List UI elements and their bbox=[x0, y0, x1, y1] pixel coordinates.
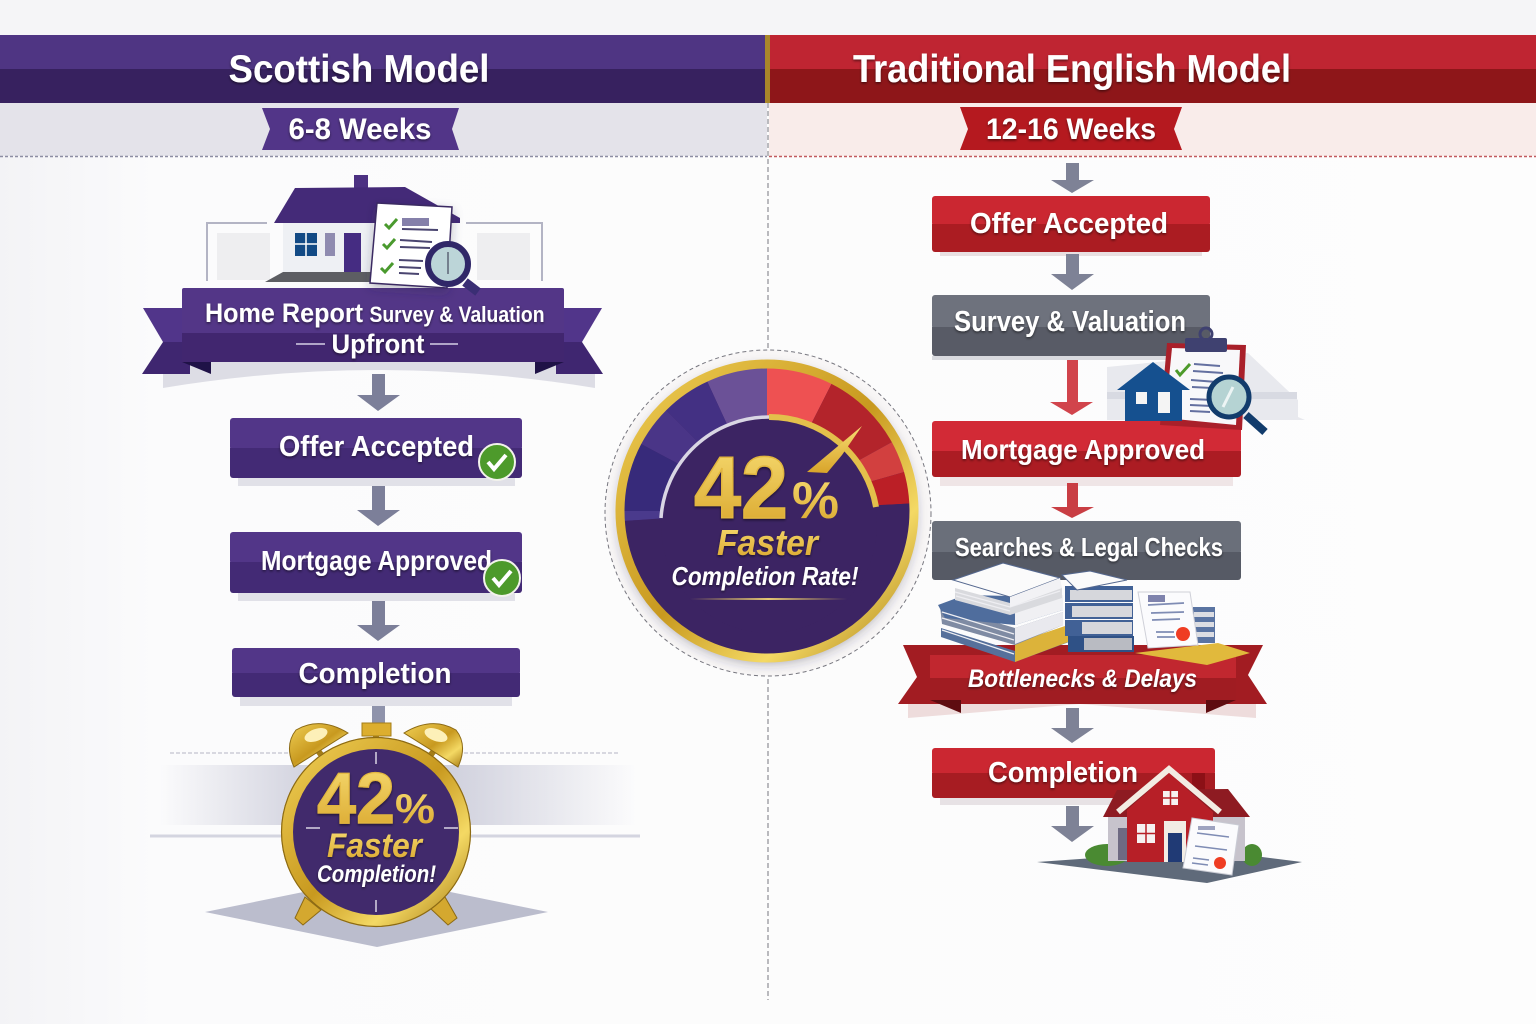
arrow: Mortgage to Searches (red) bbox=[1051, 483, 1094, 518]
arrow: Offer Accepted to Survey bbox=[1051, 254, 1094, 290]
step: Offer Accepted (Scottish) bbox=[230, 418, 522, 486]
icon: alarm clock 42% Faster Completion bbox=[282, 706, 470, 926]
arrow: Offer Accepted to Mortgage Approved bbox=[357, 486, 400, 526]
step: Offer Accepted (Scottish): Offer Accepted bbox=[279, 431, 474, 463]
step: Mortgage Approved (Scottish): Mortgage Approved bbox=[261, 545, 492, 576]
ribbon: Home Report Survey & Valuation Upfront: Upfront bbox=[332, 329, 425, 359]
arrow: Bottlenecks to Completion bbox=[1051, 708, 1094, 743]
backdrop band behind alarm clock bbox=[150, 753, 640, 947]
step: Searches & Legal Checks bbox=[932, 521, 1241, 580]
step: Mortgage Approved (English): Mortgage Approved bbox=[961, 434, 1205, 465]
duration band: 12-16 Weeks: 12-16 Weeks bbox=[986, 113, 1156, 146]
arrow: Completion onward bbox=[1051, 806, 1094, 842]
step: Completion (English): Completion bbox=[988, 757, 1138, 789]
ribbon: Home Report Survey & Valuation Upfront bbox=[142, 288, 603, 388]
icon: stacks of books and legal documents bbox=[938, 563, 1250, 665]
step: Completion (English) bbox=[932, 748, 1215, 805]
icon: alarm clock 42% Faster Completion: % bbox=[395, 785, 435, 832]
step: Mortgage Approved (Scottish) bbox=[230, 532, 522, 601]
ribbon: Home Report Survey & Valuation Upfront: Survey & Valuation bbox=[370, 302, 544, 327]
ribbon: Bottlenecks & Delays bbox=[898, 645, 1267, 718]
center badge: 42% Faster Completion Rate bbox=[605, 350, 931, 676]
step: Mortgage Approved (English) bbox=[932, 421, 1241, 486]
header: Traditional English Model: Traditional English Model bbox=[853, 48, 1291, 91]
header: Scottish Model bbox=[0, 35, 765, 103]
arrow: into Offer Accepted (English) bbox=[1051, 163, 1094, 193]
icon: Home Report house with checklist bbox=[207, 175, 542, 292]
icon: red house with certificate bbox=[1037, 769, 1302, 883]
arrow: ribbon to Offer Accepted bbox=[357, 374, 400, 411]
step: Survey & Valuation bbox=[932, 295, 1210, 360]
duration band: 6-8 Weeks bbox=[0, 103, 767, 156]
ribbon: Home Report Survey & Valuation Upfront: Home Report bbox=[205, 298, 363, 328]
center badge: 42% Faster Completion Rate: Faster bbox=[717, 522, 820, 563]
icon: alarm clock 42% Faster Completion: Completion! bbox=[317, 861, 436, 888]
arrow: Survey to Mortgage (red) bbox=[1050, 360, 1093, 415]
header: Scottish Model: Scottish Model bbox=[228, 48, 490, 91]
step: Survey & Valuation: Survey & Valuation bbox=[954, 306, 1186, 338]
center badge: 42% Faster Completion Rate: 42 bbox=[694, 438, 788, 537]
icon: alarm clock 42% Faster Completion: 42 bbox=[317, 759, 395, 839]
duration band: 12-16 Weeks bbox=[769, 103, 1536, 156]
step: Completion (Scottish): Completion bbox=[298, 658, 452, 690]
center badge: 42% Faster Completion Rate: Completion Rate! bbox=[672, 561, 859, 591]
duration band: 6-8 Weeks: 6-8 Weeks bbox=[288, 113, 432, 146]
center badge: 42% Faster Completion Rate: % bbox=[792, 472, 839, 530]
header: Traditional English Model bbox=[765, 35, 1536, 103]
icon: alarm clock 42% Faster Completion: Faster bbox=[327, 827, 424, 865]
step: Offer Accepted (English) bbox=[932, 196, 1210, 256]
step: Searches & Legal Checks: Searches & Legal Checks bbox=[955, 532, 1223, 562]
arrow: Mortgage Approved to Completion bbox=[357, 601, 400, 641]
step: Completion (Scottish) bbox=[232, 648, 520, 706]
icon: survey clipboard, blue house and magnifier bbox=[1107, 328, 1305, 432]
ribbon: Bottlenecks & Delays: Bottlenecks & Delays bbox=[968, 665, 1197, 693]
step: Offer Accepted (English): Offer Accepted bbox=[970, 208, 1168, 240]
